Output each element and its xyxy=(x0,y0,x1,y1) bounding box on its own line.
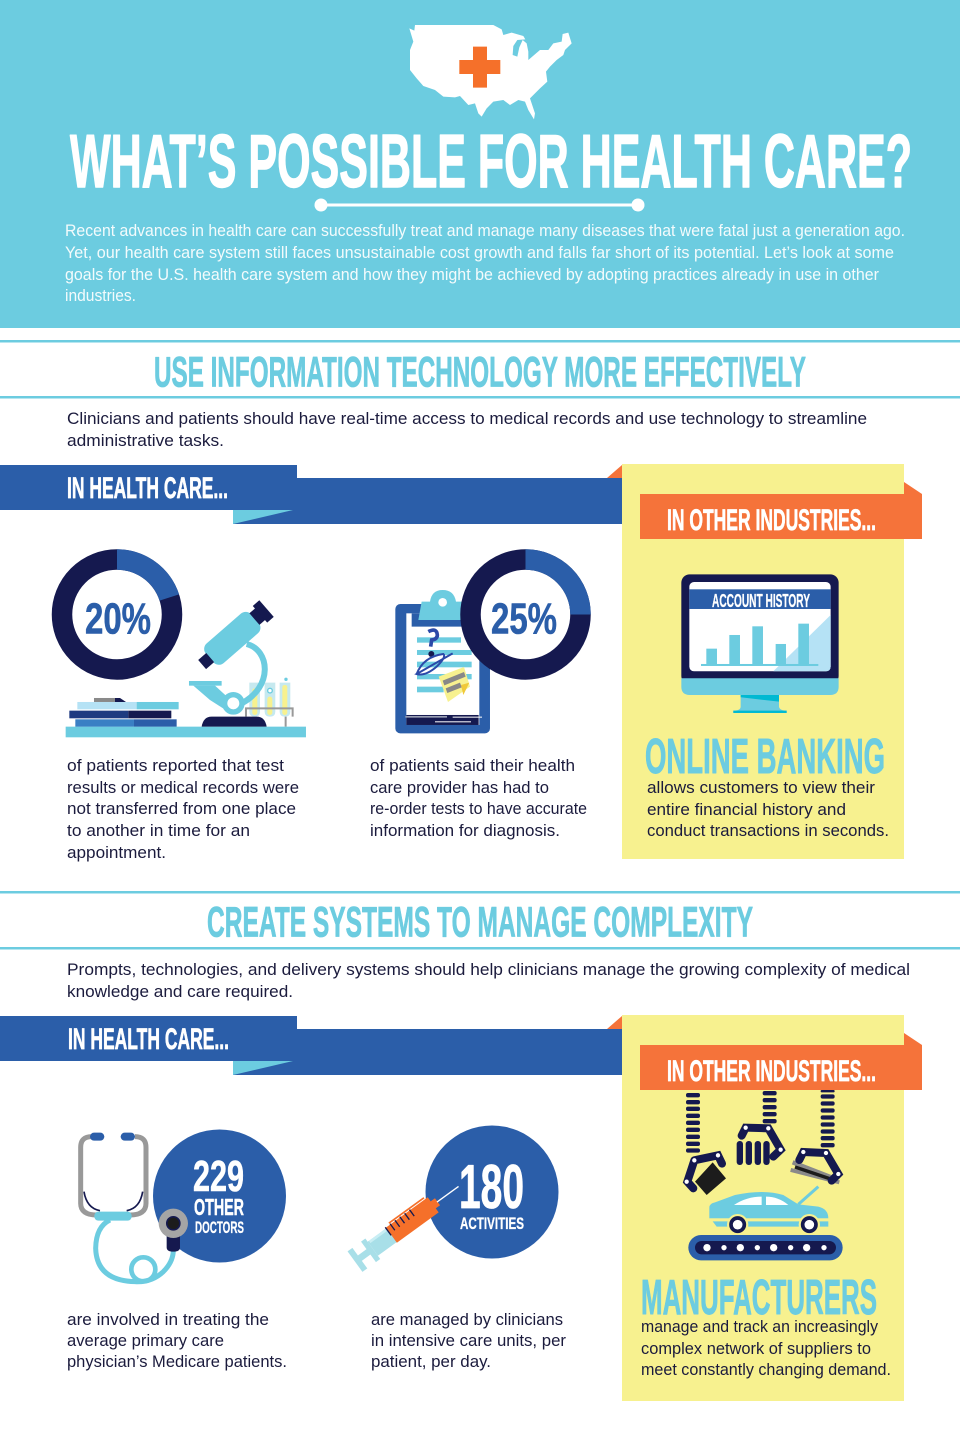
chart: 20 percent donut: 20% xyxy=(85,594,151,644)
text: 20 percent caption: results or medical records were xyxy=(67,778,299,797)
text: manufacturers: manage and track an increasingly xyxy=(641,1317,878,1336)
intro text xyxy=(65,221,905,305)
text: 25 percent caption: of patients said their health xyxy=(370,756,575,775)
text: 25 percent caption: re-order tests to have accurate xyxy=(370,799,587,818)
text: manufacturers xyxy=(641,1317,891,1379)
text: online banking: entire financial history and xyxy=(647,800,846,819)
text: 25 percent caption xyxy=(370,756,587,840)
ribbon: in health care 1: IN HEALTH CARE... xyxy=(67,472,228,505)
intro text: goals for the U.S. health care system and how they might be achieved by adopting practices already in use in other xyxy=(65,265,879,284)
panel: header xyxy=(0,0,960,328)
icon: syringe xyxy=(348,1176,466,1272)
text: online banking: conduct transactions in seconds. xyxy=(647,821,889,840)
chart: 25 percent donut: 25% xyxy=(491,594,557,644)
text: 20 percent caption: not transferred from one place xyxy=(67,799,296,818)
section 2 intro text xyxy=(67,960,910,1001)
text: online banking xyxy=(647,778,889,840)
icon: microscope and books xyxy=(66,599,306,737)
stat: 180 activities xyxy=(426,1126,558,1258)
ribbon: in other industries 2 xyxy=(640,1045,922,1090)
text: 180 caption xyxy=(371,1310,566,1371)
ribbon: in other industries 1 xyxy=(640,494,922,539)
text: 229 caption: physician’s Medicare patients. xyxy=(67,1352,287,1371)
stat: 229 other doctors: DOCTORS xyxy=(195,1218,244,1237)
panel: other industries 2 xyxy=(607,1015,922,1401)
icon: car assembly line xyxy=(684,1090,843,1260)
stat: 229 other doctors xyxy=(153,1130,286,1262)
text: 180 caption: are managed by clinicians xyxy=(371,1310,563,1329)
text: 25 percent caption: care provider has had to xyxy=(370,778,549,797)
chart: 25 percent donut xyxy=(470,560,580,670)
text: 20 percent caption xyxy=(67,756,299,862)
text: 20 percent caption: of patients reported that test xyxy=(67,756,284,775)
text: 20 percent caption: to another in time for an xyxy=(67,821,250,840)
stat: 229 other doctors: 229 xyxy=(193,1152,244,1201)
text: 229 caption: average primary care xyxy=(67,1331,224,1350)
section 1 intro text xyxy=(67,409,867,450)
text: 180 caption: patient, per day. xyxy=(371,1352,491,1371)
intro text: Yet, our health care system still faces unsustainable cost growth and falls far short of its potential. Let’s look at some xyxy=(65,243,894,262)
section 1 intro text: administrative tasks. xyxy=(67,431,224,450)
monitor label: ACCOUNT HISTORY xyxy=(712,591,810,611)
ribbon: in health care 1 xyxy=(0,465,622,524)
text: online banking: allows customers to view their xyxy=(647,778,875,797)
stat: 229 other doctors: OTHER xyxy=(194,1194,244,1220)
stat: 180 activities: ACTIVITIES xyxy=(460,1215,524,1233)
text: 229 caption: are involved in treating the xyxy=(67,1310,269,1329)
panel: other industries 1 xyxy=(607,464,922,859)
intro text: industries. xyxy=(65,286,136,305)
section 2 intro text: knowledge and care required. xyxy=(67,982,293,1001)
intro text: Recent advances in health care can successfully treat and manage many diseases that were fatal just a generation ago. xyxy=(65,221,905,240)
text: 229 caption xyxy=(67,1310,287,1371)
icon: computer monitor xyxy=(681,574,839,713)
text: manufacturers: meet constantly changing demand. xyxy=(641,1360,891,1379)
ribbon: in health care 2: IN HEALTH CARE... xyxy=(68,1023,229,1056)
section 2 intro text: Prompts, technologies, and delivery systems should help clinicians manage the growing complexity of medical xyxy=(67,960,910,979)
text: manufacturers: complex network of suppliers to xyxy=(641,1339,871,1358)
text: 20 percent caption: appointment. xyxy=(67,843,166,862)
stat: 180 activities: 180 xyxy=(459,1153,524,1222)
chart: 20 percent donut xyxy=(62,560,172,670)
text: 25 percent caption: information for diagnosis. xyxy=(370,821,560,840)
ribbon: in health care 2 xyxy=(0,1016,622,1075)
title rule xyxy=(314,198,644,212)
section 1 intro text: Clinicians and patients should have real-time access to medical records and use technology to streamline xyxy=(67,409,867,428)
icon: stethoscope xyxy=(81,1133,188,1282)
icon: clipboard xyxy=(395,590,490,733)
icon: US map with cross xyxy=(409,25,572,119)
text: 180 caption: in intensive care units, per xyxy=(371,1331,566,1350)
